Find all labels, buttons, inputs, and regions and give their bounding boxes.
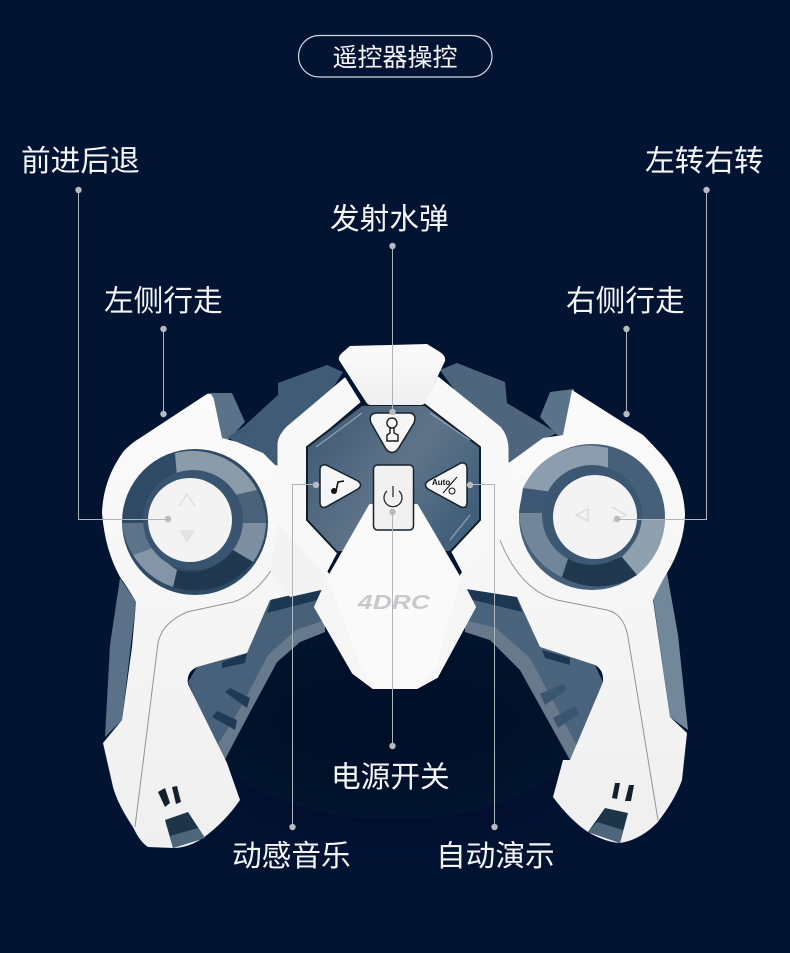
right body seam: [500, 540, 658, 820]
bezel left lower: [270, 523, 330, 597]
left body: [102, 394, 330, 848]
left down arrow: [179, 530, 195, 543]
left joystick: [122, 449, 268, 595]
left inner ring: [143, 470, 243, 570]
label: left walk: 左侧行走: [104, 285, 223, 318]
right inner ring: [542, 465, 642, 565]
dark hex panel: [307, 405, 480, 552]
upper frame left: [228, 365, 343, 470]
lower grip left rim: [216, 620, 325, 763]
right port: [588, 808, 628, 843]
left thumb button: [148, 478, 232, 562]
notch right: [542, 650, 570, 665]
lower slot left: [267, 585, 325, 613]
label: forward back: 前进后退: [21, 145, 140, 178]
right thumb button: [553, 475, 637, 559]
right ring: [519, 444, 665, 590]
left port lower: [170, 828, 205, 848]
lower grip right: [465, 590, 603, 760]
4DRC logo: 4DRC: [357, 592, 431, 614]
upper frame left base: [228, 410, 300, 470]
left port: [165, 812, 205, 848]
music button: [320, 465, 360, 507]
lever slots right: [540, 684, 579, 728]
rear side grip left: [105, 578, 136, 737]
label: music: 动感音乐: [232, 840, 351, 873]
label: power: 电源开关: [331, 761, 450, 794]
controller: [102, 344, 688, 848]
right body: [460, 390, 687, 843]
left ring: [122, 449, 268, 595]
right port lower: [588, 822, 623, 843]
upper frame right: [440, 363, 557, 468]
label: auto demo: 自动演示: [436, 840, 555, 873]
auto button: Auto: [432, 478, 450, 487]
lower slot right: [465, 585, 522, 612]
leader: auto demo: [467, 482, 498, 830]
shield inner facet: [328, 505, 460, 688]
label: turn: 左转右转: [645, 145, 764, 178]
auto button: [426, 463, 467, 507]
water button: [370, 413, 415, 452]
front shield: [315, 505, 475, 688]
title pill: [298, 36, 492, 77]
panel highlights: [316, 413, 470, 540]
shoulder left: [210, 393, 245, 440]
title pill: 遥控器操控: [332, 44, 458, 72]
leader: turn: [614, 187, 710, 522]
center bezel right: [425, 377, 508, 573]
leader: power: [389, 509, 396, 749]
shoulder right: [540, 389, 574, 436]
left vents: [158, 786, 181, 807]
center bezel left: [278, 378, 360, 575]
rear side grip right: [653, 573, 688, 730]
right arrows: [576, 507, 626, 522]
right joystick: [519, 444, 665, 590]
lever slots left: [212, 688, 250, 730]
right vents: [612, 783, 634, 801]
controller shadow: [205, 620, 585, 820]
lower grip right rim: [465, 620, 577, 760]
top white cap: [339, 344, 445, 405]
lower grip left: [188, 590, 325, 763]
power button: [374, 465, 414, 530]
leader: forward back: [75, 187, 171, 522]
leader: left walk: [160, 326, 167, 417]
label: right walk: 右侧行走: [566, 285, 685, 318]
leader: right walk: [623, 326, 630, 417]
left body seam: [135, 543, 287, 827]
leader: music: [289, 482, 319, 830]
label: water shot: 发射水弹: [330, 203, 449, 236]
notch left: [222, 653, 247, 668]
left up arrow: [179, 494, 195, 506]
leader: water shot: [389, 243, 396, 415]
